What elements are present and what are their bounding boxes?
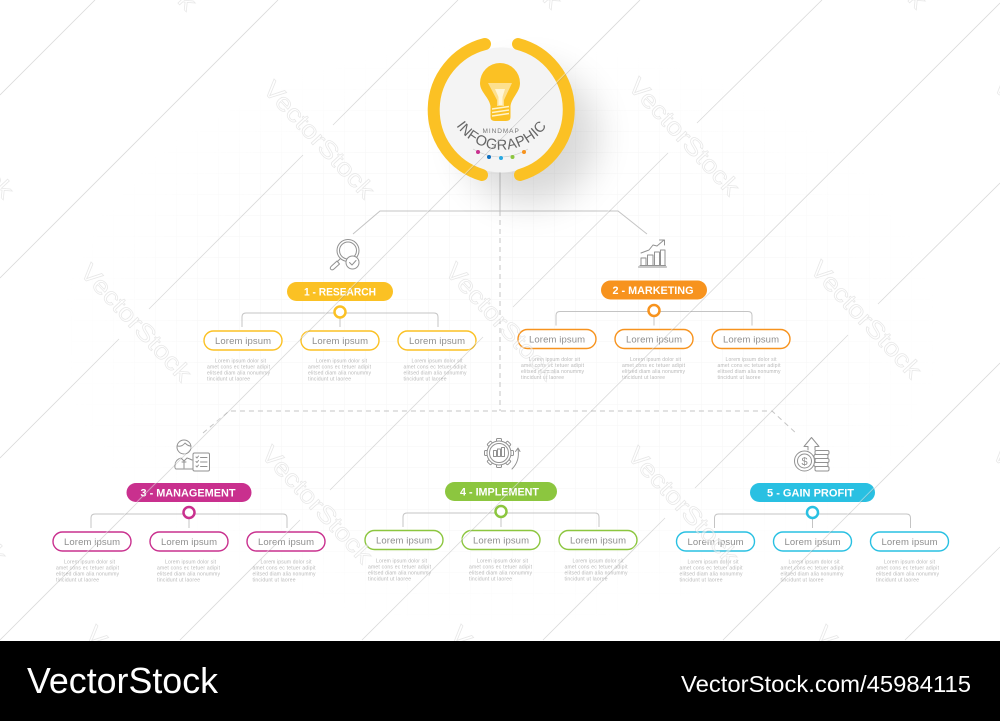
yellow ring left arc — [434, 44, 485, 175]
item 2: Lorem ipsum dolor sit — [788, 560, 840, 566]
footer brand: VectorStock — [27, 660, 219, 701]
watermark text tiles: VectorStock — [74, 259, 197, 388]
item 1: tincidunt ut laoree — [680, 578, 723, 584]
item 3: Lorem ipsum dolor sit — [412, 358, 463, 364]
dashed connector lines to bottom branches — [203, 411, 797, 434]
item 3: elitsed diam alia nonummy — [718, 369, 781, 375]
item 1: tincidunt ut laoree — [368, 576, 411, 582]
item 3: amet cons ec tetuer adipit — [718, 363, 781, 369]
item 2: elitsed diam alia nonummy — [157, 572, 220, 578]
watermark text tiles: VectorStock — [255, 441, 378, 570]
item 2: amet cons ec tetuer adipit — [622, 363, 686, 369]
item 1: tincidunt ut laoree — [56, 578, 99, 584]
footer url: VectorStock.com/45984115 — [681, 671, 971, 697]
item 1: amet cons ec tetuer adipit — [680, 566, 743, 572]
item 2 — [301, 331, 379, 382]
item 2: tincidunt ut laoree — [157, 578, 200, 584]
item 3 — [870, 532, 948, 584]
item 1: amet cons ec tetuer adipit — [521, 363, 585, 369]
item 3: Lorem ipsum dolor sit — [572, 558, 624, 564]
item 1: elitsed diam alia nonummy — [207, 370, 270, 376]
branch 1: research — [204, 282, 476, 382]
item 1: Lorem ipsum dolor sit — [64, 560, 116, 566]
icon: light bulb — [480, 63, 520, 121]
item 1: elitsed diam alia nonummy — [368, 570, 432, 576]
item 1 — [204, 331, 282, 382]
hub disc — [438, 48, 564, 172]
item 3: elitsed diam alia nonummy — [876, 572, 940, 578]
node — [184, 507, 194, 518]
item 3: Lorem ipsum dolor sit — [260, 560, 312, 566]
node — [648, 305, 660, 316]
footer bar — [0, 641, 1000, 721]
item 2 — [462, 530, 540, 582]
watermark text tiles: VectorStock — [804, 256, 927, 385]
icon: magnifier with check — [330, 240, 359, 270]
item 2: tincidunt ut laoree — [469, 576, 512, 582]
item 1: amet cons ec tetuer adipit — [56, 566, 120, 572]
mindmap label: MINDMAP — [482, 128, 520, 135]
item 3: elitsed diam alia nonummy — [404, 370, 467, 376]
item 1: Lorem ipsum dolor sit — [529, 357, 581, 363]
item 2: amet cons ec tetuer adipit — [308, 364, 372, 370]
watermark text tiles: VectorStock — [621, 442, 744, 571]
item 3: tincidunt ut laoree — [404, 376, 447, 382]
item 2: amet cons ec tetuer adipit — [157, 566, 221, 572]
item 3: tincidunt ut laoree — [564, 576, 608, 582]
item 2: Lorem ipsum dolor sit — [477, 558, 529, 564]
item 3: Lorem ipsum dolor sit — [726, 357, 777, 363]
watermark text tiles: VectorStock — [622, 73, 745, 202]
item 1: Lorem ipsum — [215, 336, 271, 347]
heading pill — [445, 482, 557, 501]
item 1: Lorem ipsum dolor sit — [376, 558, 428, 564]
item 3: amet cons ec tetuer adipit — [564, 564, 628, 570]
item 2: Lorem ipsum dolor sit — [630, 357, 682, 363]
item 2: tincidunt ut laoree — [622, 375, 665, 381]
item 2 — [615, 330, 693, 381]
icon: coins with up arrow — [794, 438, 829, 471]
item 3: Lorem ipsum — [882, 537, 938, 548]
icon: gear with bars — [484, 438, 520, 469]
item 3 — [398, 331, 476, 382]
item 2: amet cons ec tetuer adipit — [469, 564, 533, 570]
heading pill: 4 - IMPLEMENT — [460, 486, 539, 498]
item 1 — [365, 530, 443, 582]
item 2: Lorem ipsum — [312, 336, 368, 347]
item 3: amet cons ec tetuer adipit — [876, 566, 940, 572]
item 1: Lorem ipsum — [688, 537, 744, 548]
heading pill — [126, 483, 252, 502]
hub shadow — [462, 68, 598, 204]
heading pill: 1 - RESEARCH — [304, 286, 376, 298]
item 2: elitsed diam alia nonummy — [469, 570, 532, 576]
item 3: Lorem ipsum — [570, 536, 626, 546]
node — [334, 306, 346, 318]
item 2: tincidunt ut laoree — [780, 578, 824, 584]
watermark text tiles: VectorStock — [439, 258, 562, 387]
item 1: amet cons ec tetuer adipit — [368, 564, 432, 570]
heading pill — [601, 280, 707, 300]
item 1: Lorem ipsum dolor sit — [688, 560, 739, 566]
bracket — [91, 514, 287, 528]
item 2: Lorem ipsum — [473, 536, 529, 546]
item 3: tincidunt ut laoree — [718, 375, 761, 381]
icon: growth chart — [638, 240, 666, 267]
icon: coins with up arrow: $ — [801, 456, 808, 468]
item 2: amet cons ec tetuer adipit — [780, 566, 844, 572]
branch 5: gain profit — [676, 483, 948, 584]
bracket — [242, 313, 438, 327]
item 1 — [53, 532, 131, 584]
item 3: Lorem ipsum — [258, 537, 314, 548]
item 1 — [518, 330, 596, 381]
icon: manager with checklist — [175, 440, 210, 471]
branch 4: implement — [365, 482, 637, 582]
item 1: Lorem ipsum — [64, 537, 120, 548]
item 3 — [559, 530, 637, 582]
item 2: Lorem ipsum — [784, 537, 841, 548]
item 2: elitsed diam alia nonummy — [780, 572, 844, 578]
item 2: elitsed diam alia nonummy — [622, 369, 686, 375]
item 1: Lorem ipsum — [376, 536, 432, 546]
heading pill: 2 - MARKETING — [612, 285, 694, 297]
heading pill — [750, 483, 875, 502]
heading pill — [287, 282, 393, 301]
item 3: amet cons ec tetuer adipit — [252, 566, 316, 572]
item 1: elitsed diam alia nonummy — [521, 369, 584, 375]
branch 2: marketing — [518, 280, 790, 381]
yellow ring top-right arc — [518, 44, 569, 175]
item 1: Lorem ipsum — [529, 334, 585, 346]
heading pill: 3 - MANAGEMENT — [140, 488, 236, 500]
item 3 — [247, 532, 325, 584]
infographic curved title: INFOGRAPHIC — [457, 120, 545, 150]
decorative dotted arc — [473, 149, 528, 160]
item 3: elitsed diam alia nonummy — [252, 572, 316, 578]
item 2: elitsed diam alia nonummy — [308, 370, 372, 376]
item 3: Lorem ipsum — [723, 334, 779, 346]
watermark text tiles: VectorStock — [257, 76, 380, 205]
item 3: tincidunt ut laoree — [252, 578, 296, 584]
item 3: elitsed diam alia nonummy — [564, 570, 628, 576]
bracket — [556, 312, 752, 326]
item 2 — [150, 532, 228, 584]
item 2: Lorem ipsum — [161, 537, 217, 548]
item 3 — [712, 330, 790, 381]
item 1: Lorem ipsum dolor sit — [215, 358, 267, 364]
node — [496, 506, 506, 517]
item 2: Lorem ipsum — [626, 334, 682, 346]
heading pill: 5 - GAIN PROFIT — [767, 488, 854, 500]
item 2: Lorem ipsum dolor sit — [316, 358, 368, 364]
item 3: Lorem ipsum — [409, 336, 465, 347]
connector lines from hub to top branches — [353, 172, 647, 411]
item 2 — [774, 532, 852, 584]
item 1: elitsed diam alia nonummy — [680, 572, 743, 578]
item 3: amet cons ec tetuer adipit — [404, 364, 467, 370]
item 3: tincidunt ut laoree — [876, 578, 919, 584]
item 2: tincidunt ut laoree — [308, 376, 351, 382]
bracket — [403, 513, 599, 527]
item 1: tincidunt ut laoree — [207, 376, 250, 382]
item 1 — [676, 532, 754, 584]
item 2: Lorem ipsum dolor sit — [165, 560, 217, 566]
item 1: tincidunt ut laoree — [521, 375, 564, 381]
item 1: amet cons ec tetuer adipit — [207, 364, 271, 370]
node — [807, 507, 818, 518]
central hub — [428, 38, 609, 215]
branch 3: management — [53, 483, 325, 584]
bracket — [714, 514, 910, 528]
item 3: Lorem ipsum dolor sit — [884, 560, 936, 566]
item 1: elitsed diam alia nonummy — [56, 572, 120, 578]
